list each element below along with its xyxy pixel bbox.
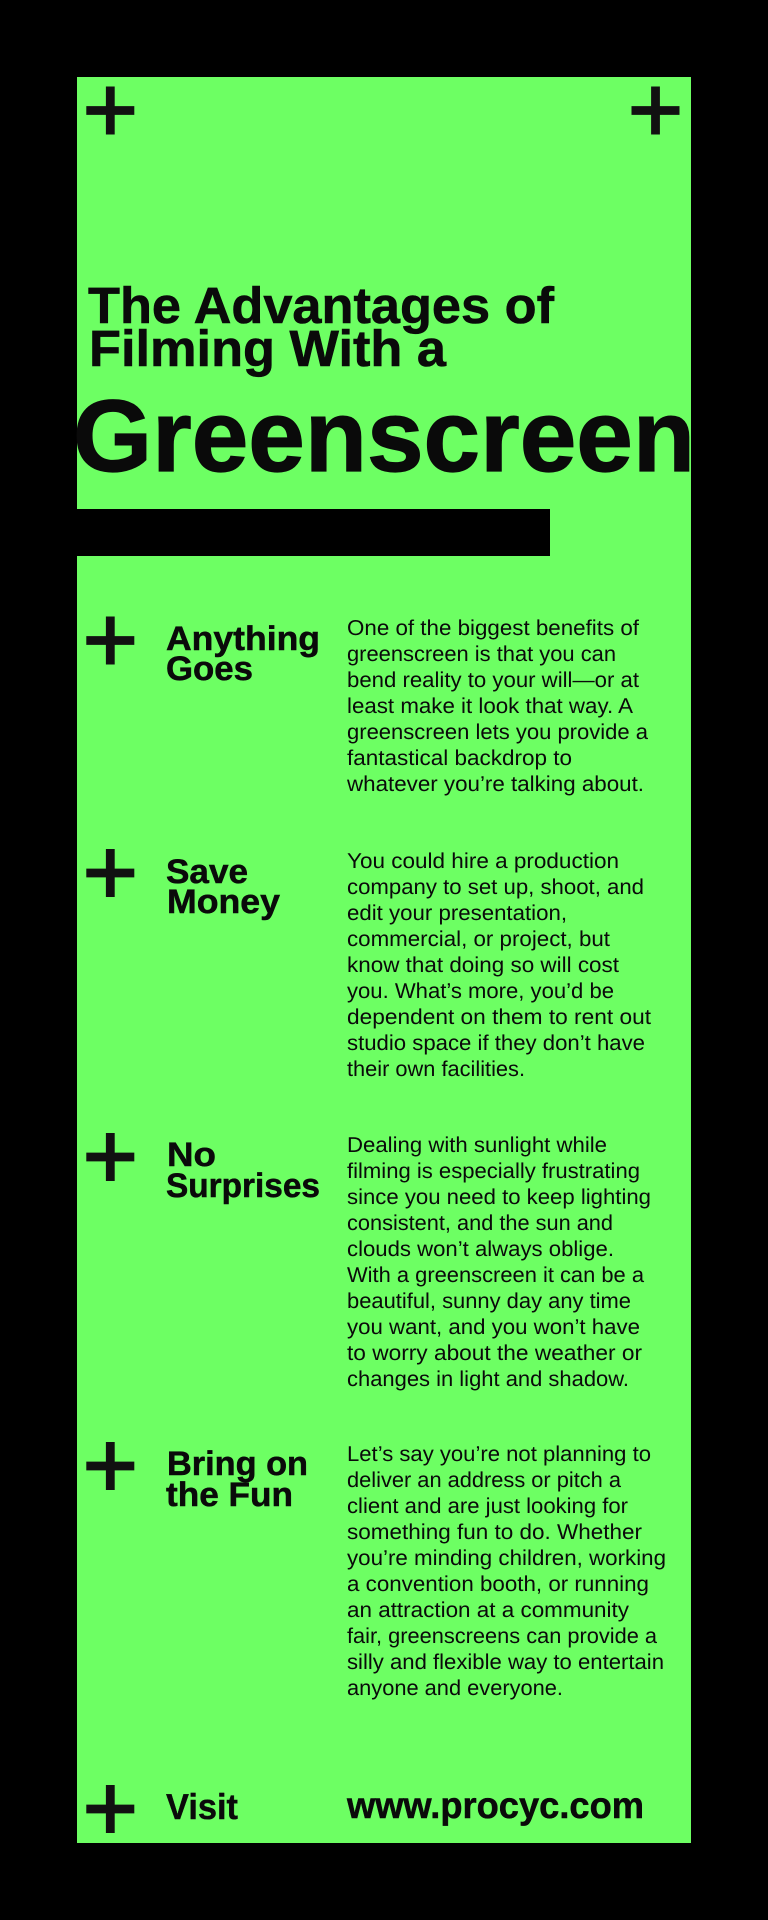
body text: Save Money: edit your presentation, <box>347 901 567 925</box>
section: footer call to action <box>86 1785 644 1833</box>
heading: No Surprises: Surprises <box>166 1167 320 1205</box>
icon: plus top left <box>86 86 134 134</box>
heading: Bring on the Fun: the Fun <box>166 1476 293 1514</box>
heading: No Surprises <box>166 1136 320 1205</box>
icon: plus <box>86 849 134 897</box>
heading: Save Money <box>166 853 280 921</box>
body text: Save Money: studio space if they don’t have <box>347 1031 645 1055</box>
body text: Anything Goes: greenscreen lets you provide a <box>347 720 648 744</box>
body text: Save Money: dependent on them to rent out <box>347 1005 651 1029</box>
icon: plus <box>86 1442 134 1490</box>
body text: Save Money: know that doing so will cost <box>347 953 619 977</box>
heading: Visit: Visit <box>166 1786 238 1827</box>
body text: Bring on the Fun: an attraction at a community <box>347 1598 629 1622</box>
body text: Save Money: you. What’s more, you’d be <box>347 979 614 1003</box>
section: No Surprises <box>86 1133 651 1391</box>
body text: Anything Goes: least make it look that way. A <box>347 694 634 718</box>
body text: Save Money: commercial, or project, but <box>347 927 610 951</box>
icon: plus <box>86 616 134 664</box>
body text: No Surprises: consistent, and the sun and <box>347 1211 613 1235</box>
body text: Save Money: company to set up, shoot, and <box>347 875 644 899</box>
icon: plus <box>86 1133 134 1181</box>
heading: Bring on the Fun: Bring on <box>167 1445 308 1483</box>
body text: No Surprises: beautiful, sunny day any time <box>347 1289 631 1313</box>
heading: Anything Goes: Goes <box>166 650 253 688</box>
title: Filming With a <box>89 320 447 377</box>
heading: Save Money: Save <box>166 853 248 891</box>
body text: No Surprises: clouds won’t always oblige. <box>347 1237 614 1261</box>
title bar <box>77 509 550 556</box>
panel: green background <box>77 77 691 1843</box>
body text: No Surprises <box>347 1133 651 1391</box>
body text: Bring on the Fun: fair, greenscreens can provide a <box>347 1624 657 1648</box>
body text: Anything Goes: whatever you’re talking about. <box>346 772 644 796</box>
body text: Save Money <box>347 849 651 1081</box>
icon: plus top right <box>632 86 679 134</box>
body text: Bring on the Fun <box>347 1442 666 1700</box>
body text: Anything Goes: bend reality to your will—or at <box>347 668 639 692</box>
body text: Bring on the Fun: silly and flexible way to entertain <box>347 1650 664 1674</box>
body text: Bring on the Fun: a convention booth, or running <box>347 1572 649 1596</box>
body text: Bring on the Fun: client and are just looking for <box>347 1494 628 1518</box>
heading: Save Money: Money <box>167 883 280 921</box>
heading: No Surprises: No <box>167 1136 216 1174</box>
body text: No Surprises: With a greenscreen it can be a <box>347 1263 644 1287</box>
body text: Bring on the Fun: something fun to do. Whether <box>347 1520 642 1544</box>
section: Anything Goes <box>86 616 648 796</box>
body text: Save Money: You could hire a production <box>347 849 619 873</box>
body text: Anything Goes: fantastical backdrop to <box>347 746 572 770</box>
body text: Anything Goes: greenscreen is that you can <box>347 642 616 666</box>
title: The Advantages of <box>88 277 555 334</box>
heading: Anything Goes <box>166 620 320 688</box>
heading: Anything Goes: Anything <box>166 620 320 658</box>
body text: Save Money: their own facilities. <box>347 1057 525 1081</box>
title: Greenscreen <box>73 379 695 493</box>
body text: Bring on the Fun: deliver an address or pitch a <box>347 1468 621 1492</box>
section: Bring on the Fun <box>86 1442 666 1700</box>
title <box>73 277 695 493</box>
body text: Bring on the Fun: you’re minding children, working <box>347 1546 666 1570</box>
body text: No Surprises: changes in light and shadow. <box>347 1367 629 1391</box>
website address: www.procyc.com <box>346 1785 644 1826</box>
body text: Bring on the Fun: anyone and everyone. <box>347 1676 563 1700</box>
icon: plus <box>86 1785 134 1833</box>
section: Save Money <box>86 849 651 1081</box>
body text: Anything Goes: One of the biggest benefits of <box>347 616 639 640</box>
body text: No Surprises: since you need to keep lighting <box>347 1185 651 1209</box>
body text: No Surprises: Dealing with sunlight while <box>347 1133 607 1157</box>
body text: Bring on the Fun: Let’s say you’re not planning to <box>347 1442 651 1466</box>
body text: Anything Goes <box>346 616 648 796</box>
body text: No Surprises: filming is especially frustrating <box>347 1159 640 1183</box>
body text: No Surprises: to worry about the weather or <box>347 1341 642 1365</box>
heading: Bring on the Fun <box>166 1445 308 1514</box>
body text: No Surprises: you want, and you won’t have <box>347 1315 640 1339</box>
